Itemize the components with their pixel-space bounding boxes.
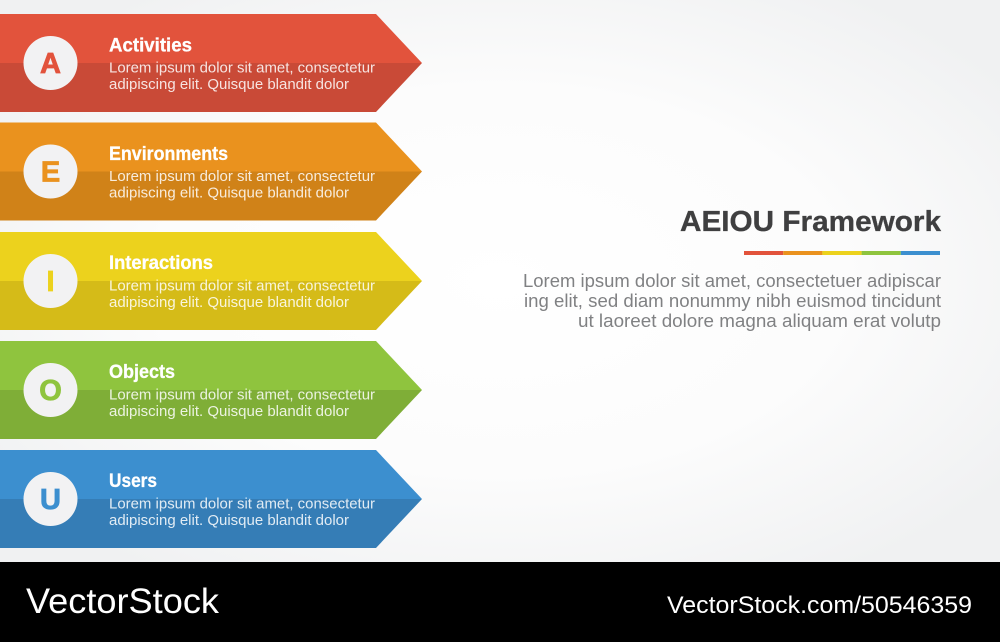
footer bar	[0, 562, 1000, 642]
panel: Users	[0, 450, 422, 548]
panel: Environments	[0, 122, 422, 220]
icon: letter I: I	[46, 266, 55, 298]
heading: Activities: Activities	[109, 36, 192, 56]
icon: letter I	[24, 254, 78, 308]
text block: Activities: adipiscing elit. Quisque blandit dolor	[109, 77, 349, 93]
panel: Interactions	[0, 232, 422, 330]
title: AEIOU Framework	[680, 206, 942, 238]
text block: Objects	[109, 388, 375, 420]
text block: Interactions	[109, 278, 375, 311]
text block: Interactions: Lorem ipsum dolor sit amet, consectetur	[109, 278, 375, 294]
heading: Objects: Objects	[109, 362, 175, 383]
arrow banner: Environments	[0, 122, 422, 220]
arrow banner: Interactions	[0, 232, 422, 330]
icon: letter E	[24, 144, 78, 198]
icon: letter U: U	[40, 484, 61, 516]
arrow banner: Objects	[0, 341, 422, 439]
footer logo: VectorStock	[26, 582, 220, 621]
heading: Interactions: Interactions	[109, 253, 213, 274]
heading: Users: Users	[109, 471, 157, 492]
icon: letter A	[24, 36, 78, 90]
text block: Users: adipiscing elit. Quisque blandit dolor	[109, 513, 349, 529]
panel: Objects	[0, 341, 422, 439]
heading: Environments: Environments	[109, 144, 228, 165]
description text: Lorem ipsum dolor sit amet, consectetuer adipiscar	[523, 271, 941, 291]
arrow banner: Activities	[0, 14, 422, 112]
icon: letter O	[24, 363, 78, 417]
icon: letter A: A	[40, 48, 61, 80]
description text: ut laoreet dolore magna aliquam erat volutp	[578, 311, 941, 331]
text block: Users: Lorem ipsum dolor sit amet, consectetur	[109, 496, 375, 512]
text block: Interactions: adipiscing elit. Quisque blandit dolor	[109, 295, 349, 311]
icon: letter U	[24, 472, 78, 526]
text block: Environments	[109, 169, 375, 202]
text block: Activities: Lorem ipsum dolor sit amet, consectetur	[109, 60, 375, 76]
icon: letter E: E	[41, 156, 60, 188]
title colour divider	[744, 251, 940, 255]
text block: Objects: Lorem ipsum dolor sit amet, consectetur	[109, 388, 375, 404]
description text	[523, 271, 941, 331]
arrow banner: Users	[0, 450, 422, 548]
text block: Users	[109, 496, 375, 529]
text block: Activities	[109, 60, 375, 93]
icon: letter O: O	[39, 375, 62, 407]
text block: Environments: Lorem ipsum dolor sit amet, consectetur	[109, 169, 375, 185]
footer image id: VectorStock.com/50546359	[667, 592, 972, 619]
text block: Objects: adipiscing elit. Quisque blandit dolor	[109, 404, 349, 420]
panel: Activities	[0, 14, 422, 112]
description text: ing elit, sed diam nonummy nibh euismod tincidunt	[524, 291, 941, 311]
text block: Environments: adipiscing elit. Quisque blandit dolor	[109, 186, 349, 202]
